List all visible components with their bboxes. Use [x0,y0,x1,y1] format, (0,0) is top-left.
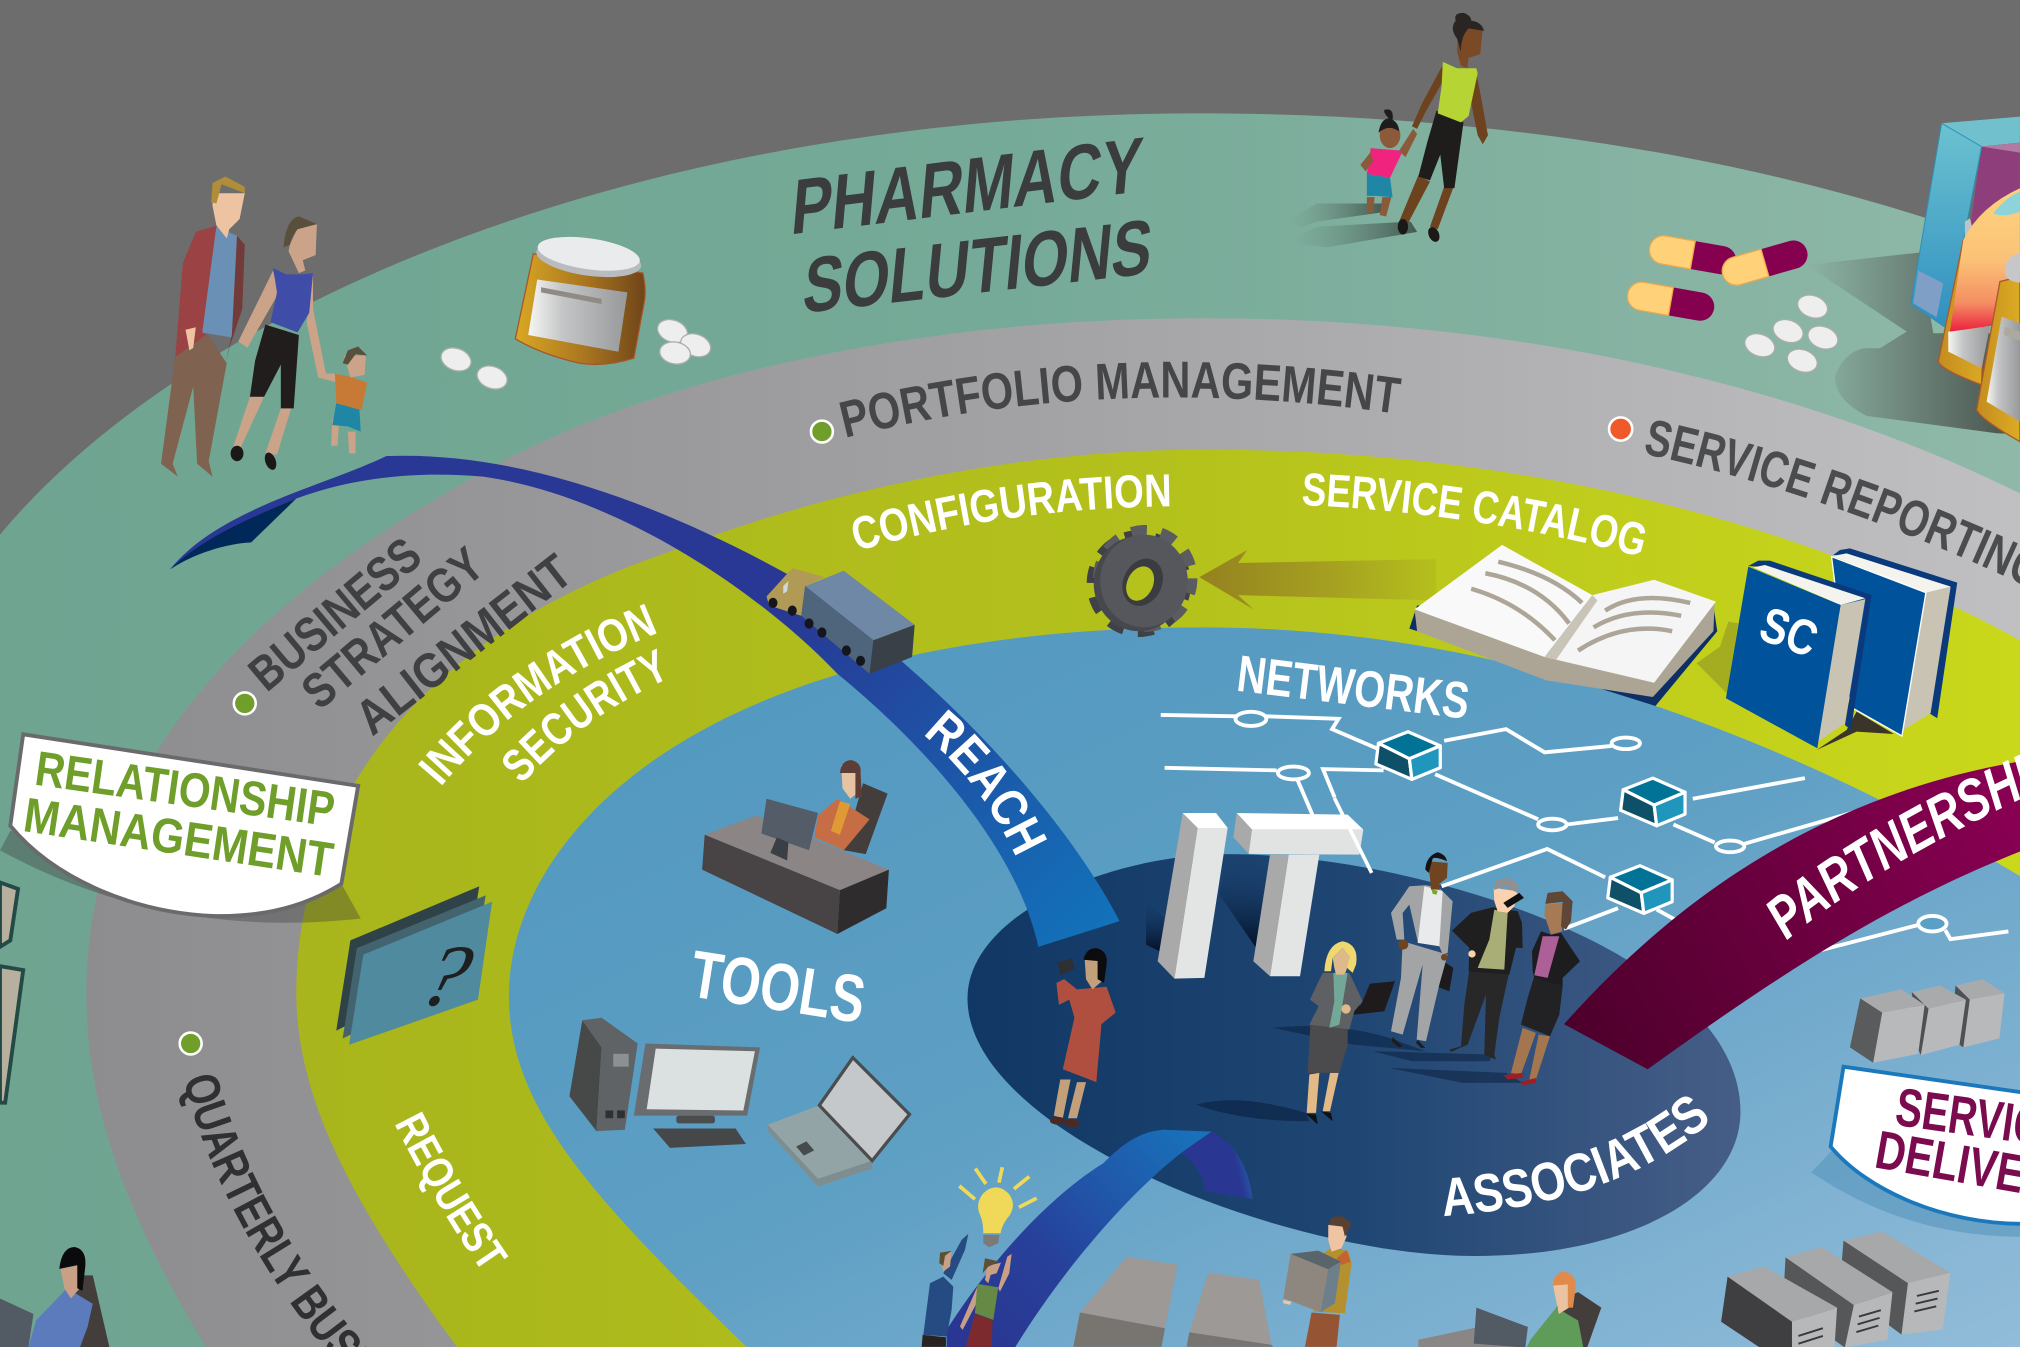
heading: business strategy alignment [234,528,582,746]
icon: amber pill jar left [515,231,645,364]
IT letters [1146,798,1372,979]
heading: associates: ASSOCIATES [1444,1096,1708,1216]
arrow: catalog to configuration [1199,550,1436,609]
callout: service delivery [1811,1067,2020,1237]
callout: relationship management: MANAGEMENT [20,788,337,888]
icon: lightbulb [959,1167,1037,1247]
icon: question card: ? [408,928,484,1024]
medicine box and jars top right [1807,117,2020,442]
heading: information security: SECURITY [503,648,662,780]
icon: capsules [1625,234,1811,323]
icon: delivery truck [767,568,915,674]
icon: open book [1409,545,1717,706]
ribbon: reach [170,456,1120,947]
pharmacy solutions title: SOLUTIONS [800,202,1156,330]
associates group [1196,852,1580,1125]
icon: gear [1092,531,1192,631]
pharmacy solutions title [788,120,1156,330]
icon: question card [336,886,492,1045]
reach label: REACH [924,709,1047,856]
icon: laptop [768,1058,910,1186]
heading: configuration: CONFIGURATION [852,474,1170,548]
IT associates disk [967,854,1740,1256]
family group on the left [161,176,367,477]
icon: small servers [1850,979,2005,1063]
callout: relationship management: RELATIONSHIP [32,742,338,837]
icon: service catalog binders SC [1697,548,1957,750]
heading: information security: INFORMATION [418,604,656,786]
grey stacks [1073,1257,1273,1347]
heading: service catalog: SERVICE CATALOG [1302,473,1646,554]
heading: business strategy alignment: ALIGNMENT [346,544,582,746]
heading: request: REQUEST [395,1112,508,1267]
pharmacy solutions title: PHARMACY [788,120,1146,252]
icon: desktop computer [569,1018,760,1148]
ribbon: lower blue loop [947,1130,1253,1347]
person at desk bottom right [1418,1272,1601,1347]
binders at left edge [0,882,23,1103]
icon: desk worker [702,760,889,934]
woman in black jacket [1504,891,1580,1085]
person carrying a box [1283,1216,1352,1347]
blonde woman with laptop [1306,941,1395,1125]
icon: white tablets left [438,316,714,393]
heading: business strategy alignment: STRATEGY [292,537,494,720]
icon: large servers [1721,1232,1950,1347]
idea group: lightbulb and people [922,1167,1352,1347]
ring: service management olive band [296,450,2020,1347]
woman cheering [960,1254,1012,1347]
heading: portfolio management: PORTFOLIO MANAGEMENT [839,362,1402,438]
woman at desk bottom left [0,1247,110,1347]
networks diagram [1161,712,2008,953]
heading: tools: TOOLS [686,937,870,1038]
ring: business alignment grey band [86,318,2020,1347]
SC label: SC [1753,596,1825,668]
heading: networks: NETWORKS [1234,644,1473,730]
network line over T [1323,769,1384,797]
man pointing [922,1234,968,1347]
network node cubes [1376,732,1685,913]
man in grey suit [1391,852,1453,1048]
man on phone [1449,878,1524,1060]
icon: white tablets right [1741,291,1841,376]
ribbon: partnership [1564,754,2020,1070]
woman on phone in red dress [1050,948,1116,1127]
callout: relationship management [0,734,361,923]
ring: tools and networks blue area [509,627,2020,1347]
heading: quarterly business [178,1031,366,1347]
mother and daughter walking [1287,13,1488,247]
heading: business strategy alignment: BUSINESS [239,528,432,702]
